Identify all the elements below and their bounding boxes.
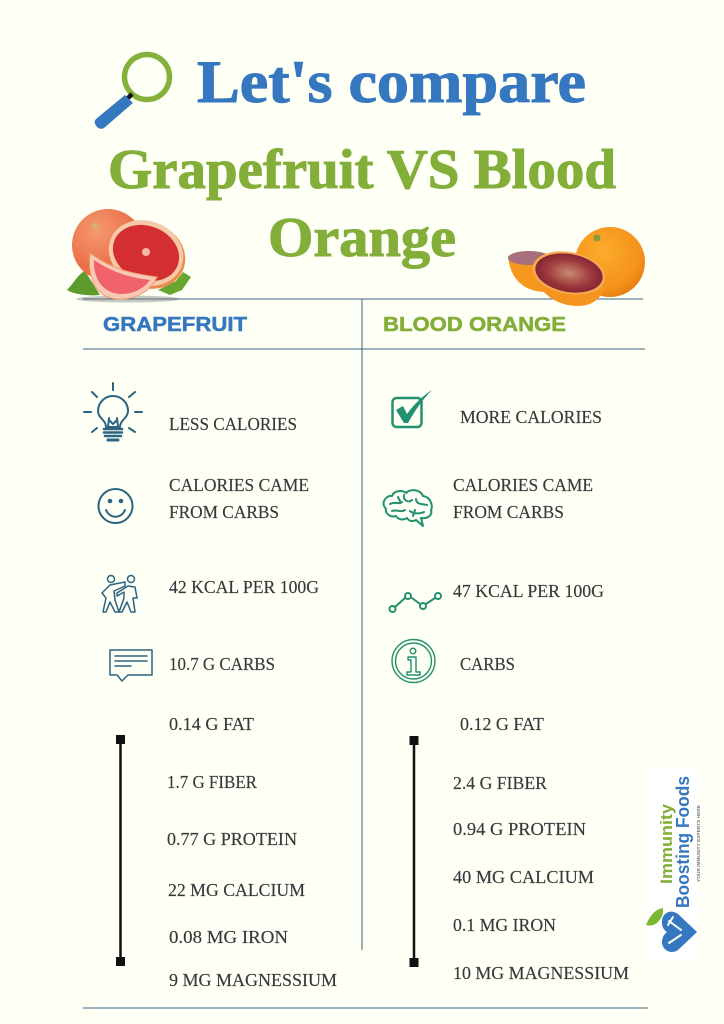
icon: logo heart	[662, 912, 697, 952]
text: blood orange column: FROM CARBS	[453, 502, 564, 522]
text: grapefruit column: 0.77 G PROTEIN	[167, 829, 297, 849]
text: grapefruit column: 22 MG CALCIUM	[168, 880, 305, 900]
heading: Grapefruit VS Blood Orange: Grapefruit VS Blood	[108, 139, 616, 201]
logo: Immunity Boosting Foods: Boosting Foods	[673, 776, 693, 908]
text: grapefruit column	[167, 414, 337, 990]
icon: logo leaf	[646, 908, 663, 926]
timeline: blood orange	[410, 736, 418, 967]
text: grapefruit column: 10.7 G CARBS	[169, 654, 275, 674]
timeline: grapefruit	[116, 735, 125, 966]
title: Let's compare: Let's compare	[197, 49, 586, 115]
heading: Grapefruit VS Blood Orange	[108, 139, 616, 269]
image: grapefruit	[67, 209, 196, 302]
text: blood orange column: 0.1 MG IRON	[453, 915, 556, 935]
icon: info circle	[392, 640, 435, 682]
icon: smiley face	[98, 489, 132, 523]
text: grapefruit column: 0.08 MG IRON	[169, 927, 288, 947]
text: blood orange column: 10 MG MAGNESSIUM	[453, 963, 629, 983]
icon: light bulb	[84, 383, 142, 440]
text: blood orange column: 40 MG CALCIUM	[453, 867, 594, 887]
text: blood orange column: 47 KCAL PER 100G	[453, 581, 604, 601]
icon: line chart	[390, 593, 441, 612]
text: blood orange column: CARBS	[460, 654, 515, 674]
text: grapefruit column: 1.7 G FIBER	[167, 772, 257, 792]
icon: magnifying glass	[95, 54, 170, 129]
text: blood orange column: CALORIES CAME	[453, 475, 593, 495]
logo: Immunity Boosting Foods: Immunity	[657, 803, 676, 884]
icon: brain	[384, 490, 432, 526]
image: blood orange	[508, 227, 645, 306]
text: grapefruit column: 9 MG MAGNESSIUM	[169, 970, 337, 990]
logo: Immunity Boosting Foods: YOUR IMMUNITY EXPERTS HERE	[696, 805, 701, 882]
text: grapefruit column: FROM CARBS	[169, 502, 279, 522]
column heading: blood orange: BLOOD ORANGE	[383, 314, 566, 336]
text: grapefruit column: CALORIES CAME	[169, 475, 309, 495]
column heading: grapefruit: GRAPEFRUIT	[103, 314, 247, 336]
text: blood orange column: MORE CALORIES	[460, 407, 602, 427]
icon: speech bubble	[110, 650, 152, 681]
text: grapefruit column: LESS CALORIES	[169, 414, 297, 434]
icon: check box	[392, 390, 432, 427]
text: blood orange column: 0.12 G FAT	[460, 714, 544, 734]
text: blood orange column: 0.94 G PROTEIN	[453, 819, 586, 839]
icon: two figures	[102, 576, 137, 612]
text: grapefruit column: 0.14 G FAT	[169, 714, 254, 734]
table lines	[83, 299, 648, 1008]
heading: Grapefruit VS Blood Orange: Orange	[268, 207, 456, 269]
text: grapefruit column: 42 KCAL PER 100G	[169, 577, 319, 597]
text: blood orange column: 2.4 G FIBER	[453, 773, 547, 793]
text: blood orange column	[453, 407, 629, 983]
logo: Immunity Boosting Foods	[644, 768, 701, 960]
